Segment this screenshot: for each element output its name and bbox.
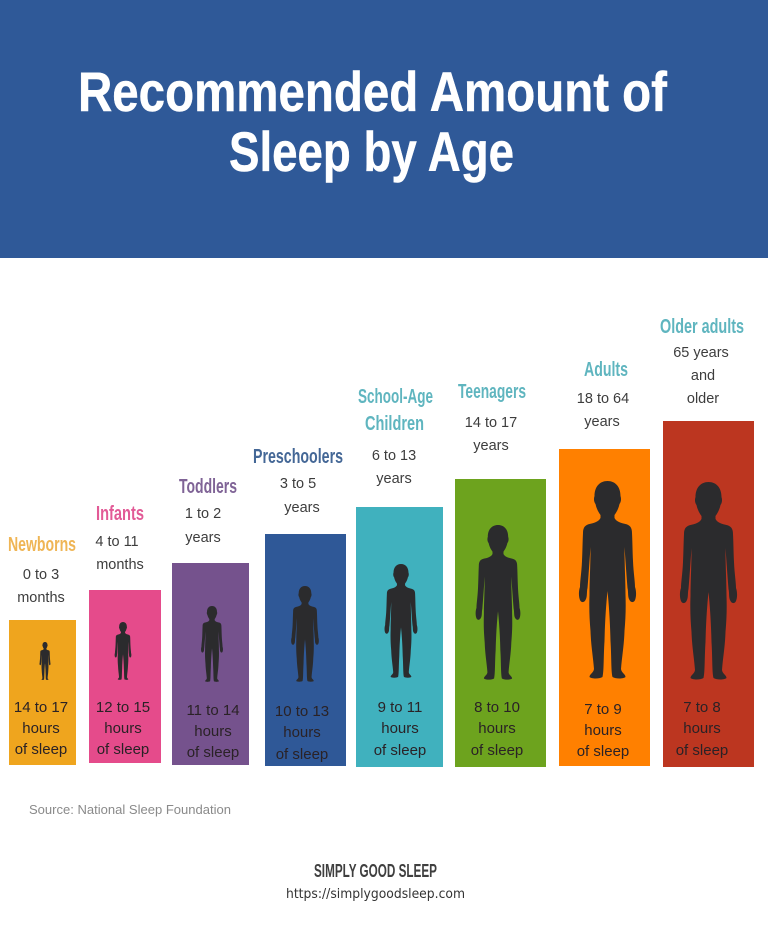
column: infants: 4 to 11	[95, 534, 139, 550]
column: newborns: months	[17, 590, 65, 606]
column: adults: 18 to 64	[577, 391, 629, 407]
column: toddlers	[172, 476, 249, 765]
column: school-age children: years	[376, 471, 412, 487]
column: adults: years	[584, 414, 620, 430]
column: adults: of sleep	[577, 743, 629, 760]
source note: Source: National Sleep Foundation	[29, 802, 231, 817]
footer brand	[286, 861, 465, 902]
column: infants: 12 to 15	[96, 699, 150, 716]
footer brand: https://simplygoodsleep.com	[286, 887, 465, 902]
column: toddlers: 1 to 2	[185, 506, 221, 522]
column: teenagers	[455, 381, 546, 767]
column: newborns: 0 to 3	[23, 567, 59, 583]
column: school-age children: of sleep	[374, 742, 426, 759]
column: school-age children: Children	[365, 413, 424, 435]
column: infants: months	[96, 557, 144, 573]
column: school-age children: 6 to 13	[372, 448, 416, 464]
column: newborns: Newborns	[8, 534, 76, 556]
column: infants	[89, 503, 161, 763]
column: newborns: 14 to 17	[14, 699, 68, 716]
column: preschoolers: years	[284, 500, 320, 516]
column: teenagers: of sleep	[471, 742, 523, 759]
column: infants: hours	[104, 720, 142, 737]
column: school-age children: hours	[381, 720, 419, 737]
column: teenagers: hours	[478, 720, 516, 737]
column: teenagers: 14 to 17	[465, 415, 517, 431]
column: adults: hours	[584, 722, 622, 739]
column: older adults: 7 to 8	[683, 699, 721, 716]
column: older adults	[660, 316, 754, 767]
title: Recommended Amount of	[78, 60, 667, 123]
column: toddlers: years	[185, 530, 221, 546]
column: newborns	[8, 534, 76, 765]
column: toddlers: 11 to 14	[186, 702, 240, 719]
column: preschoolers: Preschoolers	[253, 446, 343, 468]
column: teenagers: 8 to 10	[474, 699, 520, 716]
column: preschoolers: 3 to 5	[280, 476, 316, 492]
footer brand: SIMPLY GOOD SLEEP	[314, 861, 437, 881]
column: preschoolers	[253, 446, 346, 766]
column: infants: of sleep	[97, 741, 149, 758]
column: infants: Infants	[96, 503, 144, 525]
column: older adults: hours	[683, 720, 721, 737]
column: toddlers: hours	[194, 723, 232, 740]
column: toddlers: Toddlers	[179, 476, 237, 498]
column: older adults: 65 years	[673, 345, 729, 361]
column: older adults: and	[691, 368, 715, 384]
column: adults: 7 to 9	[584, 701, 622, 718]
column: newborns: of sleep	[15, 741, 67, 758]
title	[78, 60, 667, 183]
column: older adults: older	[687, 391, 719, 407]
column: teenagers: years	[473, 438, 509, 454]
column: adults	[559, 359, 650, 766]
column: preschoolers: of sleep	[276, 746, 328, 763]
column: preschoolers: 10 to 13	[275, 703, 329, 720]
column: preschoolers: hours	[283, 724, 321, 741]
column: school-age children	[356, 386, 443, 767]
column: newborns: hours	[22, 720, 60, 737]
header banner	[0, 0, 768, 258]
title: Sleep by Age	[229, 120, 514, 183]
column: toddlers: of sleep	[187, 744, 239, 761]
column: school-age children: School-Age	[358, 386, 433, 408]
column: school-age children: 9 to 11	[378, 699, 422, 716]
column: older adults: of sleep	[676, 742, 728, 759]
column: teenagers: Teenagers	[458, 381, 526, 403]
column: adults: Adults	[584, 359, 628, 381]
